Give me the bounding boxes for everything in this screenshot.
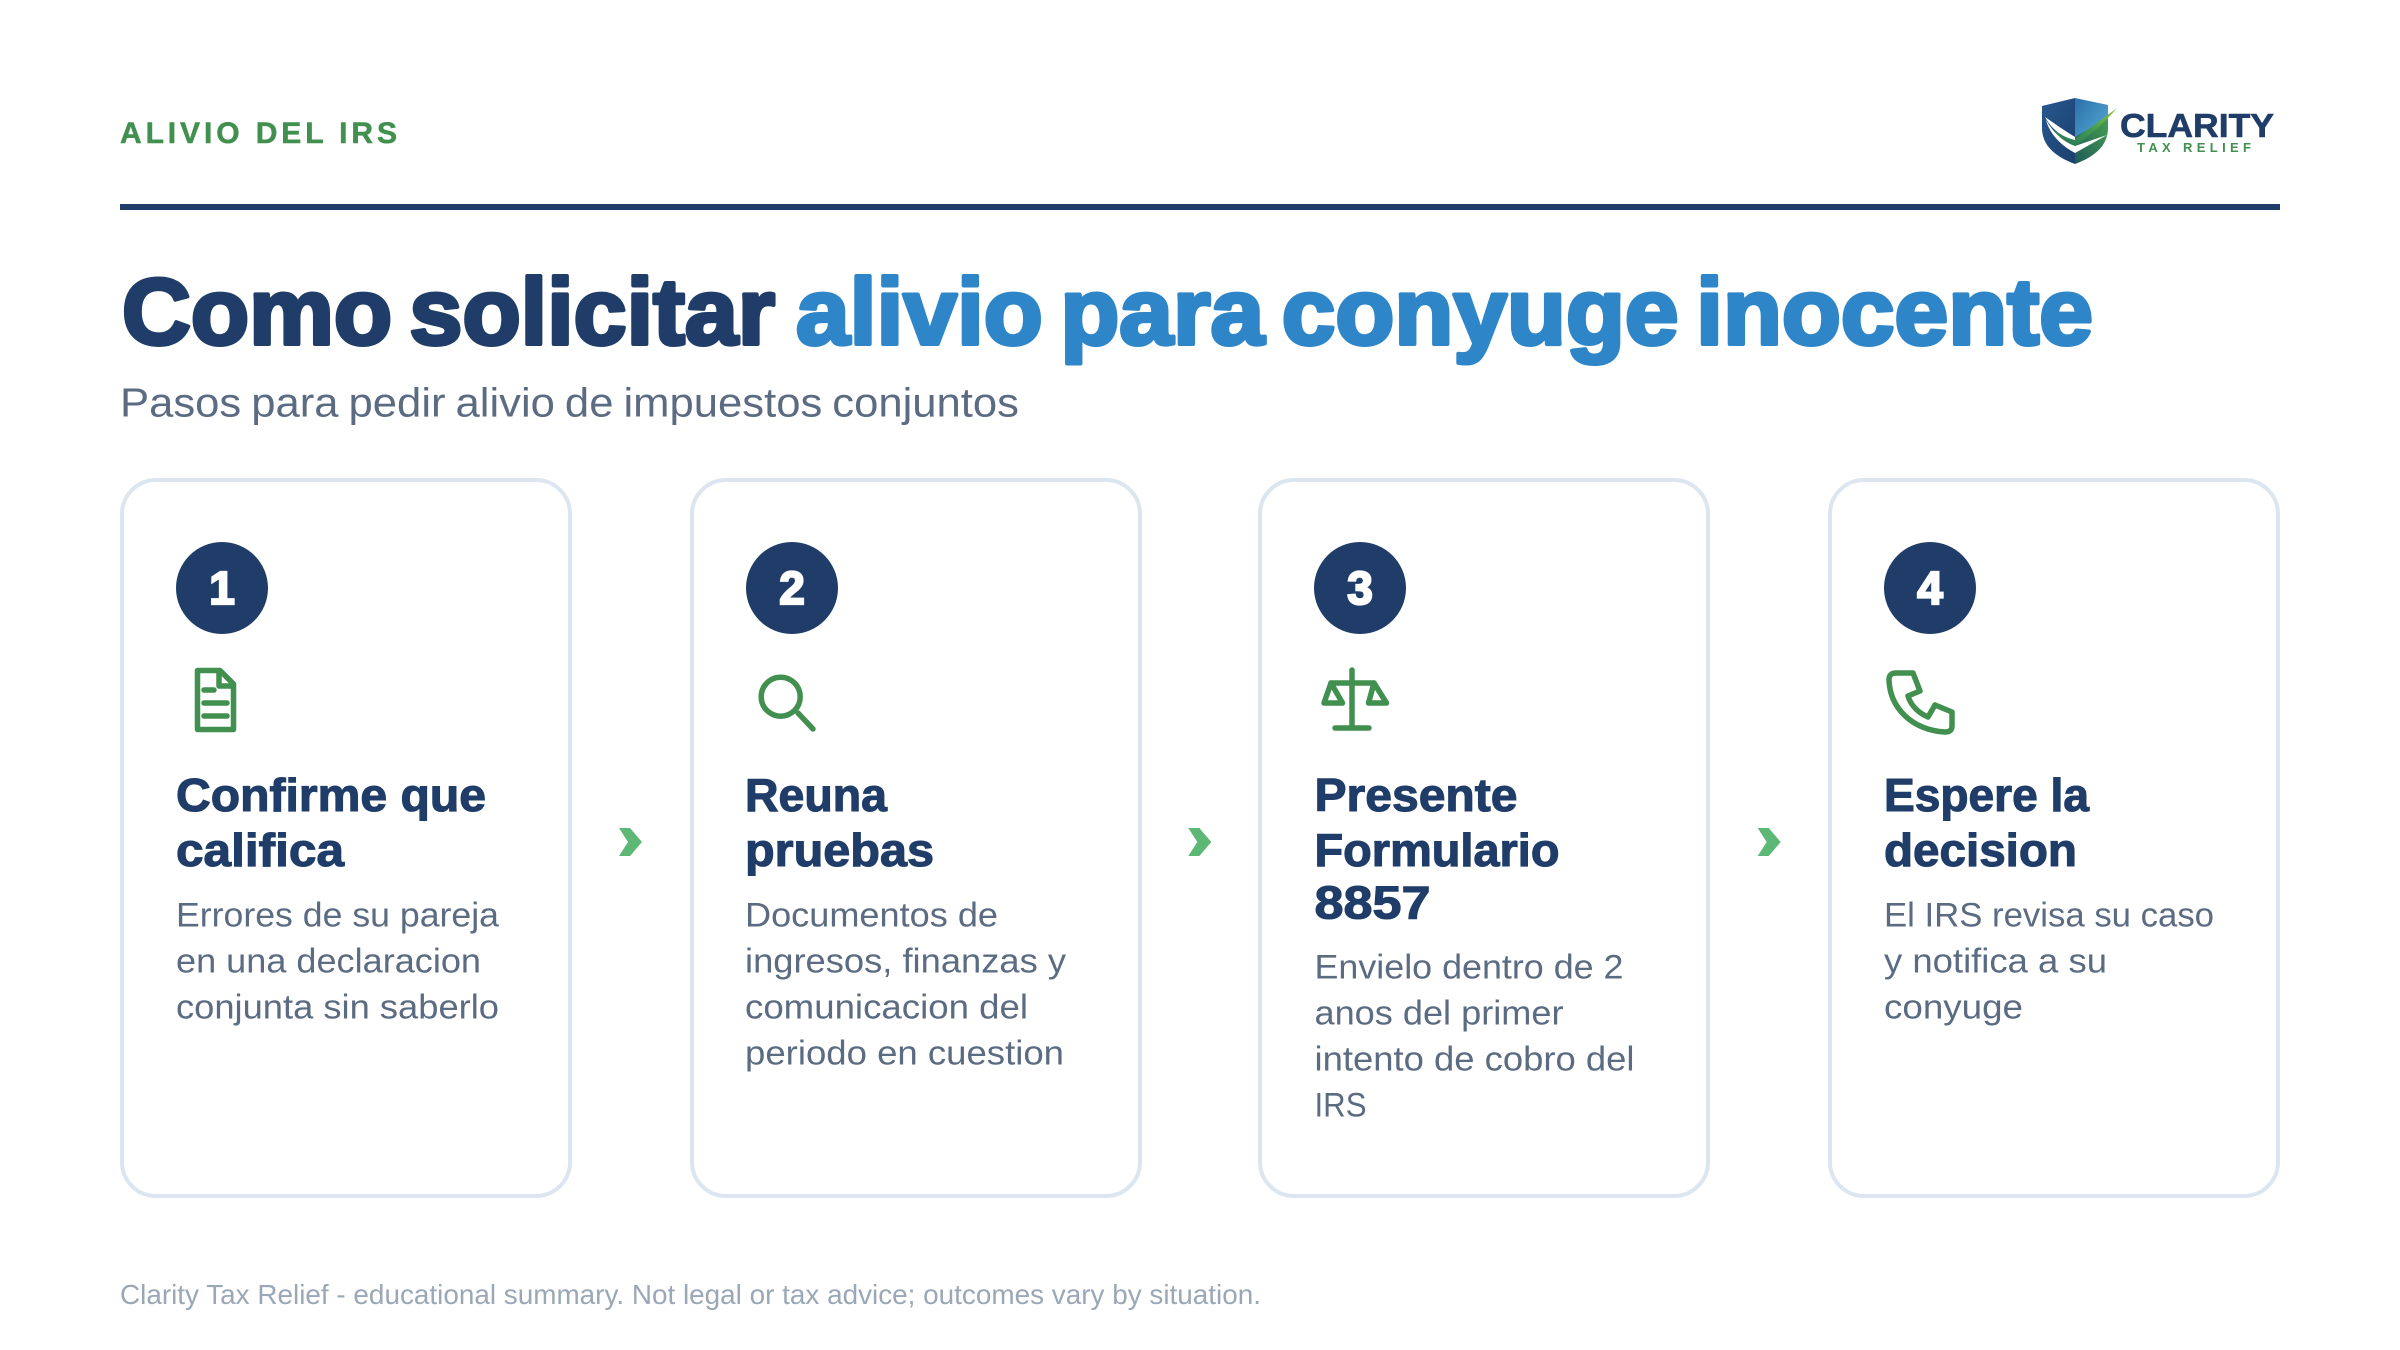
subtitle: Pasos para pedir alivio de impuestos conjuntos <box>120 380 1019 426</box>
panel: step 4 <box>1830 480 2278 1196</box>
step 4 body <box>1884 896 2214 1026</box>
arrow 2 <box>1188 828 1211 856</box>
step number 3: 3 <box>1347 562 1373 614</box>
step 3 heading: Formulario <box>1314 824 1560 876</box>
logo tagline: TAX RELIEF <box>2137 140 2251 155</box>
step 3 body: Envielo dentro de 2 <box>1314 948 1624 986</box>
footer disclaimer: Clarity Tax Relief - educational summary. Not legal or tax advice; outcomes vary by situation. <box>120 1279 1261 1310</box>
step number 1 <box>176 542 268 634</box>
step 3 heading: 8857 <box>1314 876 1430 928</box>
step number 2 <box>746 542 838 634</box>
step 3 body: anos del primer <box>1314 994 1564 1032</box>
step 2 body: ingresos, finanzas y <box>745 942 1066 980</box>
step 1 heading: Confirme que <box>176 769 486 821</box>
step 1 body: Errores de su pareja <box>176 896 499 934</box>
step 4 body: El IRS revisa su caso <box>1884 896 2214 934</box>
step number 2: 2 <box>779 562 805 614</box>
logo wordmark: CLARITY <box>2120 107 2274 144</box>
logo: Clarity Tax Relief <box>2042 98 2274 164</box>
step 3 body <box>1314 948 1634 1124</box>
step 4 heading: decision <box>1884 824 2077 876</box>
step 2 body: periodo en cuestion <box>745 1034 1064 1072</box>
step 2 body: comunicacion del <box>745 988 1028 1026</box>
step 1 body: en una declaracion <box>176 942 481 980</box>
step 2 heading: Reuna <box>745 769 887 821</box>
step number 4 <box>1884 542 1976 634</box>
icon: balance scale <box>1324 670 1386 728</box>
step 3 body: intento de cobro del <box>1314 1040 1634 1078</box>
title: alivio para conyuge inocente <box>796 259 2093 364</box>
title <box>122 259 2093 364</box>
eyebrow label: ALIVIO DEL IRS <box>120 117 397 150</box>
step 4 body: y notifica a su <box>1884 942 2107 980</box>
icon: magnifying glass <box>761 677 813 729</box>
title: Como solicitar <box>122 259 775 364</box>
step 1 heading: califica <box>176 824 344 876</box>
step 2 body: Documentos de <box>745 896 998 934</box>
step 1 body: conjunta sin saberlo <box>176 988 499 1026</box>
step number 1: 1 <box>209 562 235 614</box>
icon: document <box>198 670 234 730</box>
step number 4: 4 <box>1917 562 1943 614</box>
panel: step 1 <box>122 480 570 1196</box>
step 4 heading: Espere la <box>1884 769 2089 821</box>
step 3 heading <box>1314 769 1560 928</box>
step 1 body <box>176 896 499 1026</box>
panel: step 2 <box>692 480 1140 1196</box>
step 2 body <box>745 896 1066 1072</box>
step 2 heading <box>745 769 934 876</box>
step 1 heading <box>176 769 486 876</box>
icon: telephone <box>1889 673 1952 732</box>
arrow 3 <box>1758 828 1781 856</box>
arrow 1 <box>619 828 642 856</box>
panel: step 3 <box>1260 480 1708 1196</box>
step number 3 <box>1314 542 1406 634</box>
step 3 heading: Presente <box>1314 769 1518 821</box>
step 4 body: conyuge <box>1884 988 2023 1026</box>
step 3 body: IRS <box>1314 1086 1366 1124</box>
header rule <box>120 204 2280 210</box>
step 2 heading: pruebas <box>745 824 934 876</box>
step 4 heading <box>1884 769 2089 876</box>
icon: shield with check <box>2042 98 2117 164</box>
